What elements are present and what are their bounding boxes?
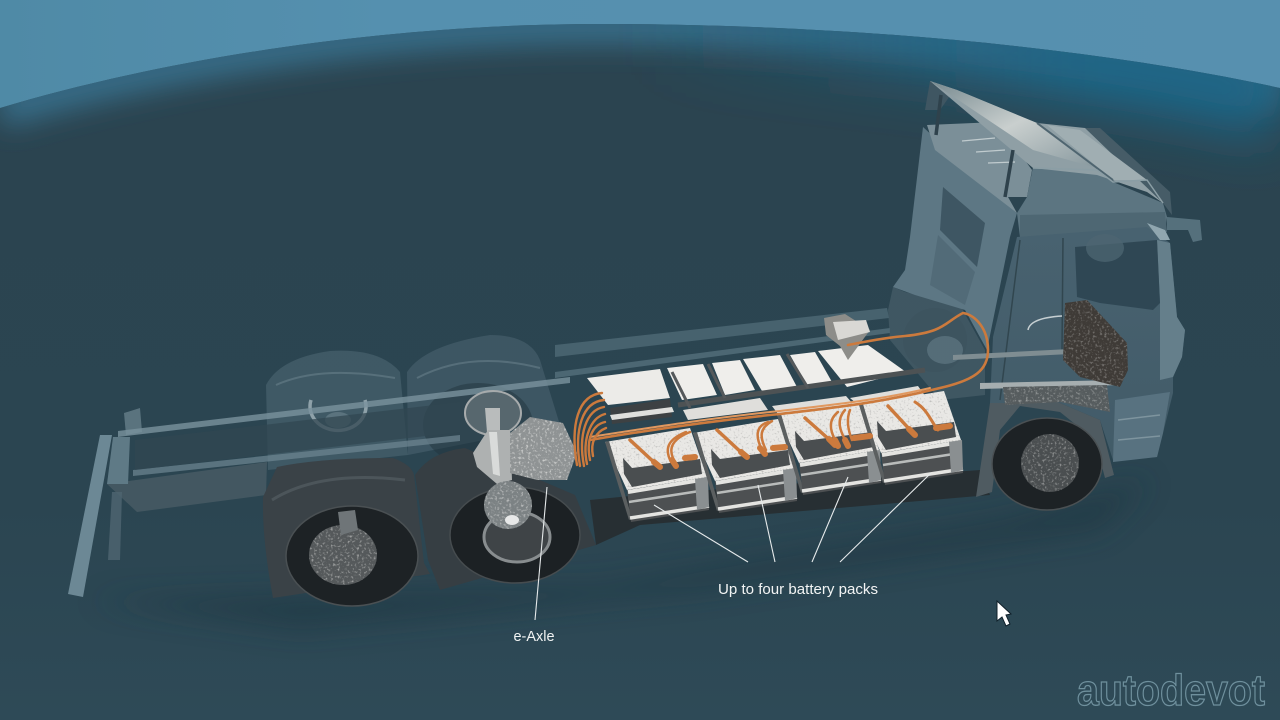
callout lines <box>535 473 931 620</box>
cab: windscreen <box>1075 240 1160 310</box>
near fender and tyre, rear axle <box>263 458 430 606</box>
cab: lower bumper and step <box>1113 392 1170 462</box>
cab: right pillar <box>1157 240 1185 380</box>
connectors <box>654 426 950 467</box>
battery pack 4 <box>859 391 963 485</box>
label: battery packs: Up to four battery packs <box>718 581 878 598</box>
e-Axle: lower hub plate <box>484 512 550 562</box>
cab: spoiler struts <box>936 95 1013 197</box>
cab: door shut line <box>1000 238 1063 400</box>
e-Axle: upper hub <box>465 391 521 435</box>
near fender and tyre, drive axle <box>415 448 596 590</box>
far side battery-bay frame <box>555 308 890 378</box>
pack 3 branches <box>805 418 832 442</box>
cab rear fairing and wheel arch <box>888 287 985 400</box>
cab: side window <box>940 187 985 267</box>
cab: front upper fascia <box>1017 167 1167 237</box>
cab: roof spoiler <box>925 81 1172 215</box>
pack 2 branches <box>717 430 744 455</box>
main cable run <box>590 313 988 440</box>
side chassis rail between axles <box>590 470 990 545</box>
far chassis rail and rear frame <box>68 377 570 597</box>
pack 1 branches <box>630 440 657 465</box>
cab: mirror <box>1147 223 1170 240</box>
engine and front chassis <box>953 300 1128 412</box>
icon: mouse cursor <box>997 601 1011 626</box>
battery pack 1 <box>605 428 709 522</box>
battery pack 3 <box>777 401 881 495</box>
cab: roof panel <box>927 122 1032 213</box>
e-Axle: differential housing <box>473 430 512 484</box>
e-Axle: lower hub <box>484 481 532 529</box>
left loop bundle <box>575 393 606 466</box>
truck <box>68 81 1202 620</box>
front tyre and hub <box>992 418 1102 510</box>
cab: lower side window <box>930 235 975 305</box>
cab: front wheel arch <box>976 400 1114 497</box>
cab: side wall <box>893 127 1017 350</box>
label: e-Axle: e-Axle <box>514 628 554 645</box>
rear far fenders and wheels (ghosted) <box>266 335 560 470</box>
battery pack leaders <box>654 473 931 562</box>
rear battery row: white module tops <box>587 345 928 424</box>
four battery packs <box>605 391 963 522</box>
e-Axle assembly <box>465 391 577 562</box>
orange high-voltage cables <box>575 313 988 467</box>
cab: front face <box>990 227 1185 460</box>
battery pack 2 <box>693 419 797 513</box>
pack 4 branches <box>888 406 912 432</box>
high-voltage box near cab <box>824 314 870 360</box>
e-Axle leader <box>535 487 547 620</box>
e-Axle: axle tube <box>485 408 500 432</box>
truck drop shadow <box>240 598 446 623</box>
cab <box>893 81 1202 497</box>
e-Axle: gearbox <box>510 417 577 480</box>
